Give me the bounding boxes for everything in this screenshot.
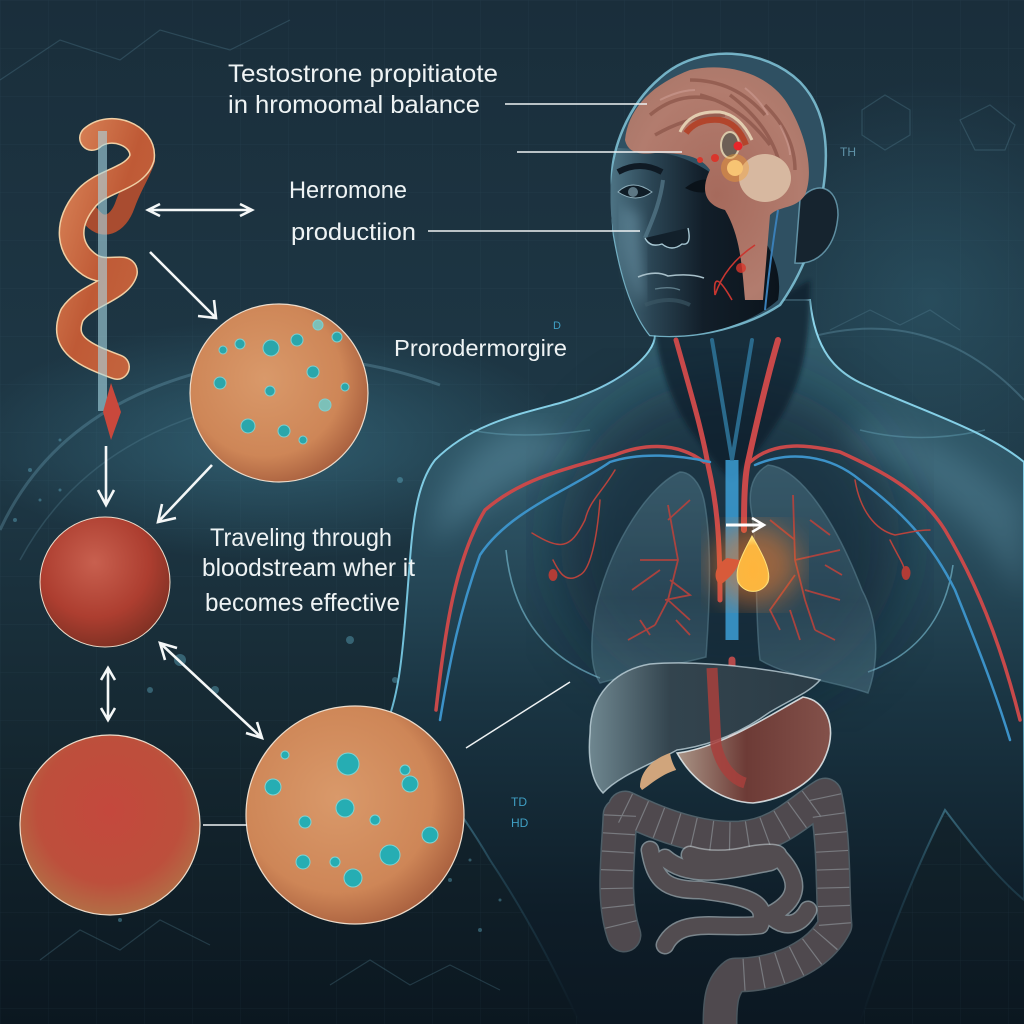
- liver and stomach: [589, 663, 831, 803]
- corpus callosum: [680, 112, 752, 145]
- small tags: TD: [511, 795, 527, 809]
- small tags: D: [553, 320, 561, 332]
- neck: [655, 280, 810, 480]
- intestines: [617, 795, 835, 1024]
- label: traveling through bloodstream: [202, 524, 415, 617]
- small tags: HD: [511, 816, 529, 830]
- helix ribbon: [69, 131, 142, 367]
- sphere: middle red: [40, 517, 170, 647]
- bloodstream dots: [13, 438, 502, 932]
- label: traveling through bloodstream: bloodstream wher it: [202, 554, 415, 582]
- figure: man: [384, 54, 1024, 1024]
- sphere: lower with teal spots: [246, 706, 464, 924]
- brain folds: [650, 80, 795, 170]
- label: traveling through bloodstream: becomes effective: [205, 589, 400, 617]
- label: testosterone: Testostrone propitiatote: [228, 60, 498, 88]
- pectoral arcs: [470, 430, 985, 678]
- ear: [795, 188, 838, 263]
- label: hormone production: productiion: [291, 219, 416, 246]
- arrow: upper sphere to middle sphere: [158, 465, 212, 522]
- label: hormone production: [289, 177, 416, 246]
- shoulder highlight left: [432, 425, 590, 545]
- helix back coil: [90, 160, 145, 225]
- lungs: [592, 465, 876, 693]
- sphere: lower red: [20, 735, 200, 915]
- heart: [710, 518, 800, 605]
- facial features: [618, 166, 722, 305]
- label: testosterone: in hromoomal balance: [228, 91, 480, 119]
- arrows: [98, 204, 262, 738]
- label: hormone production: Herromone: [289, 177, 407, 204]
- small intestine: [650, 850, 808, 945]
- glass head: [612, 54, 826, 336]
- blood vessels: [436, 340, 1020, 740]
- label: testosterone: [228, 60, 498, 119]
- arrow: needle to middle sphere: [98, 446, 114, 505]
- colon: [617, 795, 835, 1024]
- label: prorodermorgire: Prorodermorgire: [394, 335, 567, 361]
- facial light: [621, 205, 645, 305]
- shoulder highlight right: [850, 420, 1024, 600]
- arrow: helix to upper sphere: [150, 252, 216, 318]
- small tags: [511, 145, 856, 830]
- sphere: upper with teal spots: [190, 304, 368, 482]
- bronchial branches: [628, 495, 842, 640]
- diagram: helix with needle: [69, 131, 145, 440]
- arrow: middle sphere to large sphere: [160, 643, 262, 738]
- small glands: [548, 566, 910, 581]
- side branches: [532, 470, 930, 578]
- needle tip: [103, 383, 121, 440]
- arrow: middle sphere to lower sphere: [101, 668, 115, 720]
- torso: [384, 300, 1024, 1024]
- brain: [625, 67, 809, 310]
- small tags: TH: [840, 145, 856, 159]
- leader lines: [203, 104, 682, 825]
- label: traveling through bloodstream: Traveling through: [210, 524, 392, 552]
- needle rod: [98, 131, 107, 411]
- chest shading: [560, 380, 900, 700]
- arrow: helix to hormone production: [148, 204, 252, 216]
- face: [611, 148, 779, 336]
